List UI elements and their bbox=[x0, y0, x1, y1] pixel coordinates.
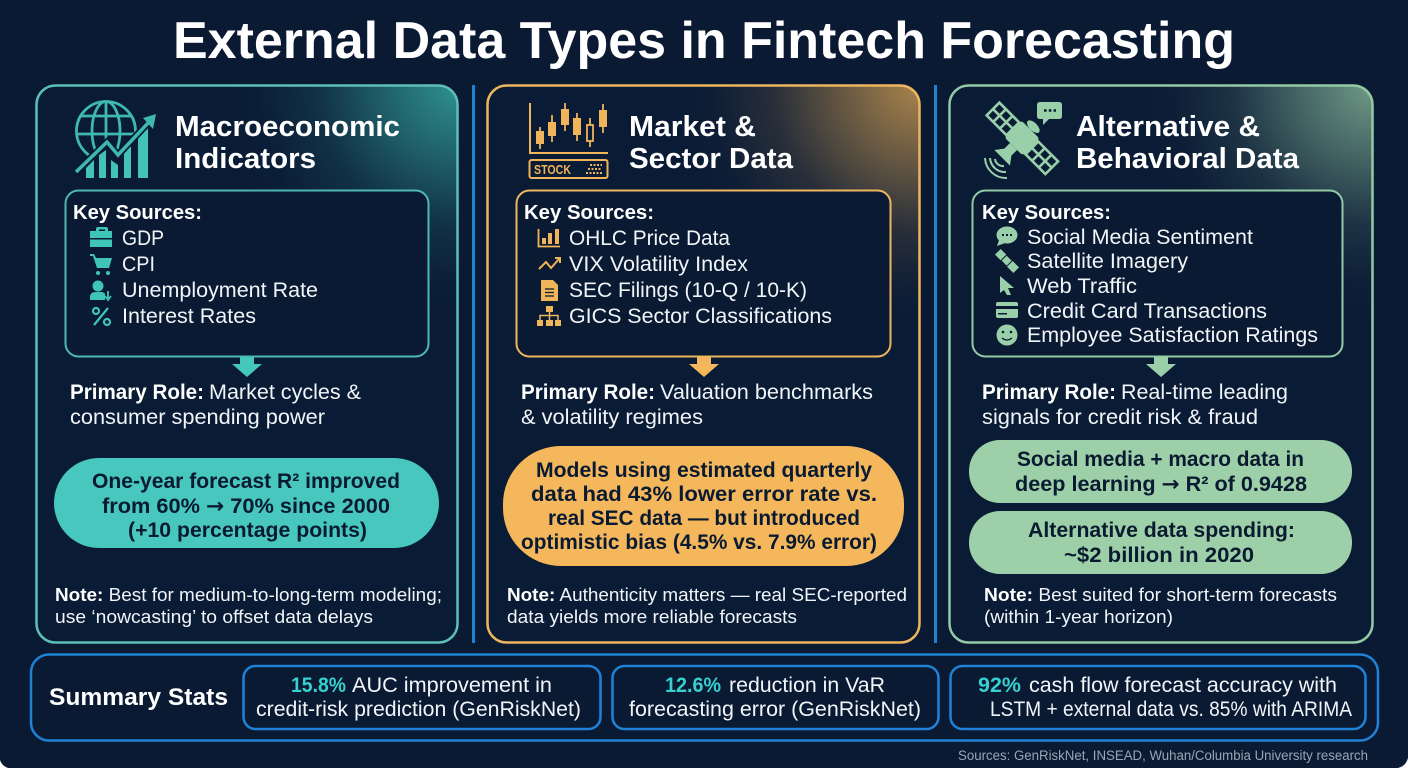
primary role: & volatility regimes bbox=[521, 406, 703, 429]
callout: social media R squared bbox=[969, 440, 1352, 503]
stat: AUC improvement bbox=[244, 666, 600, 729]
primary role: Primary Role: bbox=[70, 381, 204, 404]
primary role bbox=[521, 381, 873, 429]
stat: cash flow accuracy bbox=[950, 666, 1366, 729]
primary role bbox=[982, 381, 1288, 429]
callout: estimated data error rate: data had 43% lower error rate vs. bbox=[531, 483, 877, 506]
stat: AUC improvement: credit-risk prediction (GenRiskNet) bbox=[256, 698, 581, 721]
primary role: Primary Role: bbox=[521, 381, 655, 404]
primary role: signals for credit risk & fraud bbox=[982, 406, 1258, 429]
callout: social media R squared: Social media + macro data in bbox=[1017, 448, 1304, 471]
item: SEC filings: SEC Filings (10-Q / 10-K) bbox=[569, 279, 807, 302]
panel: macroeconomic indicators bbox=[36, 86, 458, 642]
key sources heading: Key Sources: bbox=[524, 202, 654, 224]
icon: chat bubble bbox=[996, 226, 1018, 246]
stat: VaR reduction bbox=[612, 666, 938, 729]
primary role: Valuation benchmarks bbox=[660, 381, 873, 404]
callout: forecast improvement: One-year forecast R² improved bbox=[92, 470, 400, 493]
callout: alternative data spending: Alternative data spending: bbox=[1028, 519, 1295, 542]
icon: hierarchy bbox=[537, 306, 561, 326]
item: satellite imagery: Satellite Imagery bbox=[1027, 250, 1189, 273]
item: CPI: CPI bbox=[122, 253, 155, 276]
heading: Indicators bbox=[175, 143, 316, 175]
key sources box bbox=[66, 190, 428, 356]
item: employee satisfaction: Employee Satisfaction Ratings bbox=[1027, 324, 1318, 347]
panel: alternative and behavioral data bbox=[950, 86, 1372, 642]
key sources heading: Key Sources: bbox=[982, 202, 1111, 224]
primary role: consumer spending power bbox=[70, 406, 325, 429]
note second line: use ‘nowcasting’ to offset data delays bbox=[55, 607, 373, 627]
key sources box bbox=[516, 190, 890, 356]
heading: Market & bbox=[629, 111, 756, 143]
callout: forecast improvement: from 60% → 70% since 2000 bbox=[102, 494, 390, 518]
icon: smiley bbox=[996, 324, 1018, 346]
icon: document bbox=[541, 280, 558, 301]
icon: satellite with speech bubble bbox=[973, 95, 1066, 187]
icon: candlestick stock chart bbox=[530, 103, 608, 178]
title: External Data Types in Fintech Forecasting bbox=[173, 12, 1235, 70]
stat: VaR reduction: reduction in VaR bbox=[729, 674, 885, 697]
callout: forecast improvement: (+10 percentage points) bbox=[128, 519, 367, 542]
primary role: Primary Role: bbox=[982, 381, 1116, 404]
item: web traffic: Web Traffic bbox=[1027, 275, 1137, 298]
callout: estimated data error rate: optimistic bias (4.5% vs. 7.9% error) bbox=[521, 531, 877, 554]
icon: person with down arrow bbox=[90, 280, 111, 300]
note: Note: Authenticity matters — real SEC-reported bbox=[507, 585, 907, 605]
primary role: Market cycles & bbox=[209, 381, 361, 404]
callout: alternative data spending bbox=[969, 511, 1352, 574]
callout: estimated data error rate: real SEC data — but introduced bbox=[548, 507, 860, 530]
item: OHLC: OHLC Price Data bbox=[569, 227, 730, 250]
stat: VaR reduction: 12.6% bbox=[665, 674, 721, 697]
heading: Sector Data bbox=[629, 143, 794, 175]
stat: AUC improvement: 15.8% bbox=[291, 674, 346, 697]
heading: Behavioral Data bbox=[1076, 143, 1300, 175]
icon: small satellite bbox=[995, 249, 1019, 273]
callout: forecast improvement bbox=[54, 458, 439, 548]
icon: cursor bbox=[1000, 276, 1014, 295]
callout: estimated data error rate bbox=[503, 446, 904, 566]
icon: candlestick stock chart: STOCK bbox=[534, 162, 571, 177]
callout: alternative data spending: ~$2 billion in 2020 bbox=[1064, 544, 1254, 567]
icon: bar chart bbox=[538, 229, 560, 246]
icon: briefcase bbox=[90, 227, 112, 247]
note: Note: Best suited for short-term forecasts bbox=[984, 585, 1337, 605]
stat: cash flow accuracy: LSTM + external data vs. 85% with ARIMA bbox=[990, 698, 1352, 721]
callout: social media R squared: deep learning → R² of 0.9428 bbox=[1015, 472, 1307, 496]
item: GDP: GDP bbox=[122, 227, 164, 250]
key sources heading: Key Sources: bbox=[73, 202, 202, 224]
icon: volatility line bbox=[539, 258, 560, 269]
icon: credit card bbox=[996, 302, 1018, 318]
stat: AUC improvement: AUC improvement in bbox=[352, 674, 552, 697]
item: credit card transactions: Credit Card Transactions bbox=[1027, 300, 1267, 323]
icon: globe with rising chart bbox=[76, 102, 160, 178]
divider: right bbox=[934, 85, 937, 643]
stat: VaR reduction: forecasting error (GenRiskNet) bbox=[629, 698, 921, 721]
arrow down bbox=[689, 357, 719, 377]
callout: estimated data error rate: Models using estimated quarterly bbox=[536, 459, 872, 482]
icon: cart bbox=[90, 254, 112, 275]
note second line: data yields more reliable forecasts bbox=[507, 607, 797, 627]
item: social media sentiment: Social Media Sentiment bbox=[1027, 226, 1253, 249]
heading bbox=[175, 111, 400, 175]
heading bbox=[1076, 111, 1300, 175]
primary role bbox=[70, 381, 361, 429]
sources footnote: Sources: GenRiskNet, INSEAD, Wuhan/Columbia University research bbox=[958, 748, 1368, 763]
note second line: (within 1-year horizon) bbox=[984, 607, 1173, 627]
primary role: Real-time leading bbox=[1121, 381, 1288, 404]
note: Note: Best for medium-to-long-term modeling; bbox=[55, 585, 442, 605]
summary heading: Summary Stats bbox=[49, 684, 228, 711]
summary stats bar bbox=[31, 654, 1378, 740]
item: unemployment rate: Unemployment Rate bbox=[122, 279, 318, 302]
panel: market and sector data bbox=[488, 86, 920, 642]
item: VIX: VIX Volatility Index bbox=[569, 253, 749, 276]
item: GICS: GICS Sector Classifications bbox=[569, 305, 832, 328]
stat: cash flow accuracy: 92% bbox=[978, 674, 1021, 697]
key sources box bbox=[972, 190, 1342, 356]
divider: left bbox=[472, 85, 475, 643]
heading: Alternative & bbox=[1076, 111, 1260, 143]
heading bbox=[629, 111, 794, 175]
heading: Macroeconomic bbox=[175, 111, 400, 143]
icon: percent bbox=[93, 308, 110, 325]
arrow down bbox=[232, 357, 262, 377]
stat: cash flow accuracy: cash flow forecast accuracy with bbox=[1029, 674, 1337, 697]
arrow down bbox=[1146, 357, 1176, 377]
item: interest rates: Interest Rates bbox=[122, 305, 256, 328]
